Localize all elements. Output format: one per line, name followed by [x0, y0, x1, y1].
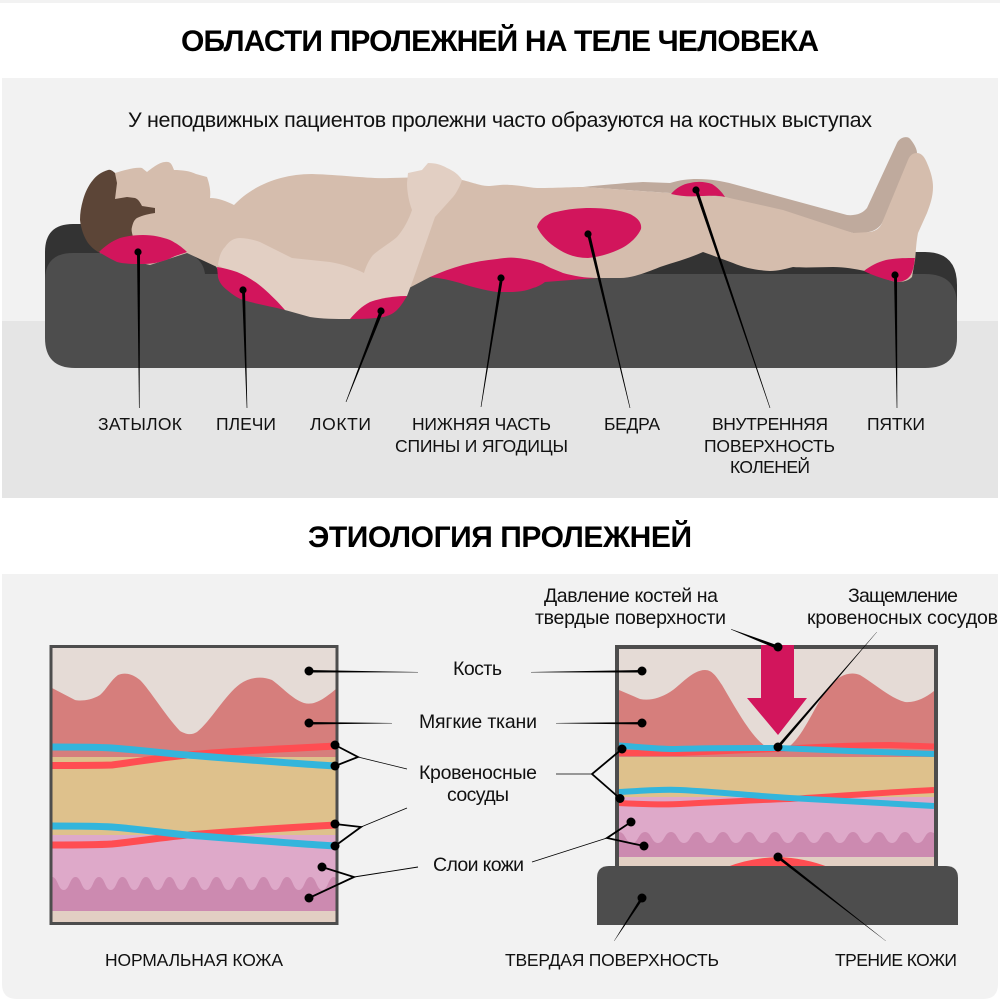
leader: hard surface — [614, 894, 646, 941]
panel: pressure ulcer areas on the body — [2, 78, 998, 498]
leader: lower back — [481, 274, 505, 407]
diagram: normal skin cross-section — [50, 646, 338, 925]
blood vessels lower pair — [619, 790, 934, 806]
illustration: far leg — [583, 137, 917, 233]
label: pinching of blood vessels: Защемление — [848, 585, 958, 607]
label: back of head: ЗАТЫЛОК — [98, 414, 183, 434]
soft tissue layer — [52, 674, 336, 757]
pressure arrow — [747, 645, 807, 735]
epidermis wavy layer — [52, 877, 336, 911]
leader: back of head — [134, 248, 142, 408]
soft tissue layer — [619, 670, 934, 757]
illustration: patient arm — [218, 163, 462, 319]
illustration: patient body — [100, 153, 933, 319]
subtitle text: У неподвижных пациентов пролежни часто образуются на костных выступах — [128, 108, 872, 132]
illustration: mattress front layer — [45, 253, 957, 368]
leader: elbow — [346, 307, 385, 402]
blood vessels upper pair — [52, 746, 336, 766]
label: blood vessels: сосуды — [447, 784, 509, 806]
label: skin layers: Слои кожи — [433, 854, 524, 876]
dermis layer — [52, 835, 336, 912]
leader: shoulder — [239, 286, 247, 408]
label: lower back and buttocks: НИЖНЯЯ ЧАСТЬ — [412, 414, 551, 434]
leader: skin friction — [774, 852, 886, 941]
marker area: heel — [864, 258, 915, 282]
illustration: hair — [80, 170, 155, 253]
label: soft tissue: Мягкие ткани — [419, 711, 537, 733]
marker area: lower back and buttocks — [430, 258, 597, 292]
label: blood vessels — [419, 762, 537, 806]
label: lower back and buttocks — [395, 414, 568, 456]
label: elbows: ЛОКТИ — [310, 414, 371, 434]
label: blood vessels: Кровеносные — [419, 762, 537, 784]
label: hips: БЕДРА — [604, 414, 660, 434]
frame — [617, 647, 936, 868]
leader: inner knee — [692, 186, 770, 408]
label: inner surface of knees — [704, 414, 835, 477]
fat layer — [619, 757, 934, 797]
label: lower back and buttocks: СПИНЫ И ЯГОДИЦЫ — [395, 436, 568, 456]
surface layer — [619, 857, 934, 867]
label: shoulders: ПЛЕЧИ — [216, 414, 276, 434]
leaders: skin layers — [304, 818, 648, 902]
marker area: elbow — [350, 296, 407, 319]
label: pinching of blood vessels — [807, 585, 998, 629]
leader: bone pressure — [731, 629, 782, 652]
blood vessels lower pair — [52, 825, 336, 846]
marker area: hip — [537, 208, 641, 258]
marker area: inner knee — [671, 182, 725, 197]
marker area: shoulder — [217, 267, 285, 310]
marker area: back of head — [99, 235, 187, 264]
label: inner surface of knees: ВНУТРЕННЯЯ — [712, 414, 828, 434]
leaders: blood vessels — [330, 740, 626, 850]
label: heels: ПЯТКИ — [867, 414, 925, 434]
label: skin friction: ТРЕНИЕ КОЖИ — [835, 950, 957, 970]
label: normal skin: НОРМАЛЬНАЯ КОЖА — [105, 950, 283, 970]
leaders: soft tissue — [304, 718, 646, 728]
fat layer — [52, 757, 336, 835]
label: bone pressure on hard surfaces — [535, 585, 726, 629]
leader: vessel pinching — [774, 632, 877, 752]
blood vessels upper pair — [619, 745, 934, 754]
dermis layer — [619, 797, 934, 857]
label: pinching of blood vessels: кровеносных сосудов — [807, 607, 998, 629]
epidermis wavy layer — [619, 832, 934, 857]
hard surface — [597, 866, 958, 925]
frame — [51, 646, 337, 924]
surface layer — [52, 911, 336, 923]
title: etiology section heading: ЭТИОЛОГИЯ ПРОЛЕЖНЕЙ — [308, 520, 692, 554]
leader: hip — [584, 230, 630, 408]
leaders: bone — [304, 666, 646, 676]
label: inner surface of knees: КОЛЕНЕЙ — [730, 456, 810, 477]
illustration: mattress back layer — [45, 224, 957, 330]
friction area — [727, 857, 828, 867]
label: bone pressure on hard surfaces: твердые поверхности — [535, 607, 726, 629]
panel: etiology of pressure ulcers — [2, 574, 998, 999]
label: bone pressure on hard surfaces: Давление костей на — [544, 585, 718, 607]
label: hard surface: ТВЕРДАЯ ПОВЕРХНОСТЬ — [505, 950, 719, 970]
label: bone: Кость — [453, 658, 502, 680]
label: inner surface of knees: ПОВЕРХНОСТЬ — [704, 436, 835, 456]
leader: heel — [891, 271, 899, 408]
title: top section heading: ОБЛАСТИ ПРОЛЕЖНЕЙ НА ТЕЛЕ ЧЕЛОВЕКА — [181, 24, 819, 58]
diagram: compressed skin cross-section — [597, 645, 958, 925]
